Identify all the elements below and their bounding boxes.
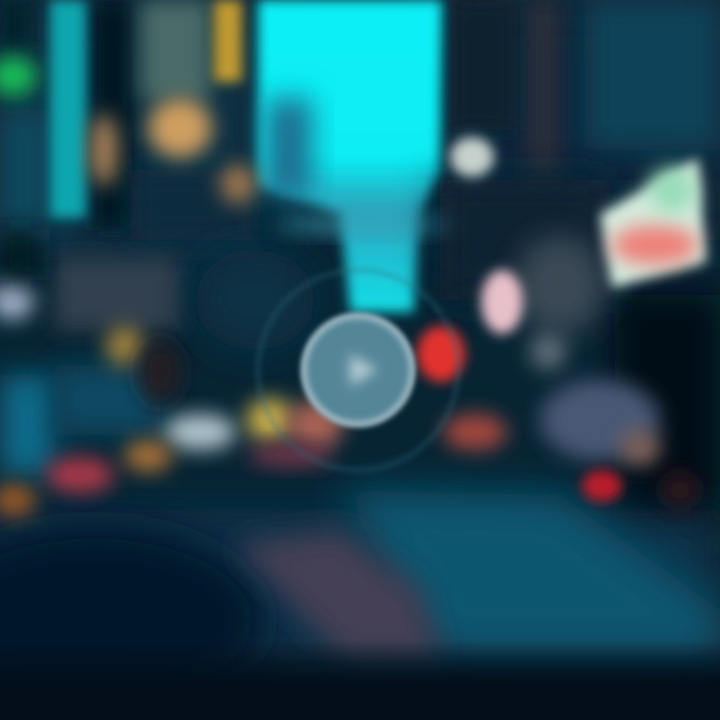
street colored lights xyxy=(0,326,698,516)
white street light xyxy=(450,137,494,177)
warm window lights xyxy=(90,98,256,204)
pink sign xyxy=(481,270,523,334)
yellow sign xyxy=(214,0,242,82)
left mid block xyxy=(0,230,315,475)
play button xyxy=(258,270,458,470)
right billboard xyxy=(600,158,706,288)
background buildings xyxy=(0,0,720,260)
right mid area xyxy=(440,180,720,555)
street road surfaces xyxy=(0,490,720,720)
cyan sky column xyxy=(258,0,465,312)
red light xyxy=(417,326,465,382)
green light xyxy=(0,56,37,96)
cyan stripe xyxy=(50,0,86,218)
play triangle icon xyxy=(350,354,378,386)
